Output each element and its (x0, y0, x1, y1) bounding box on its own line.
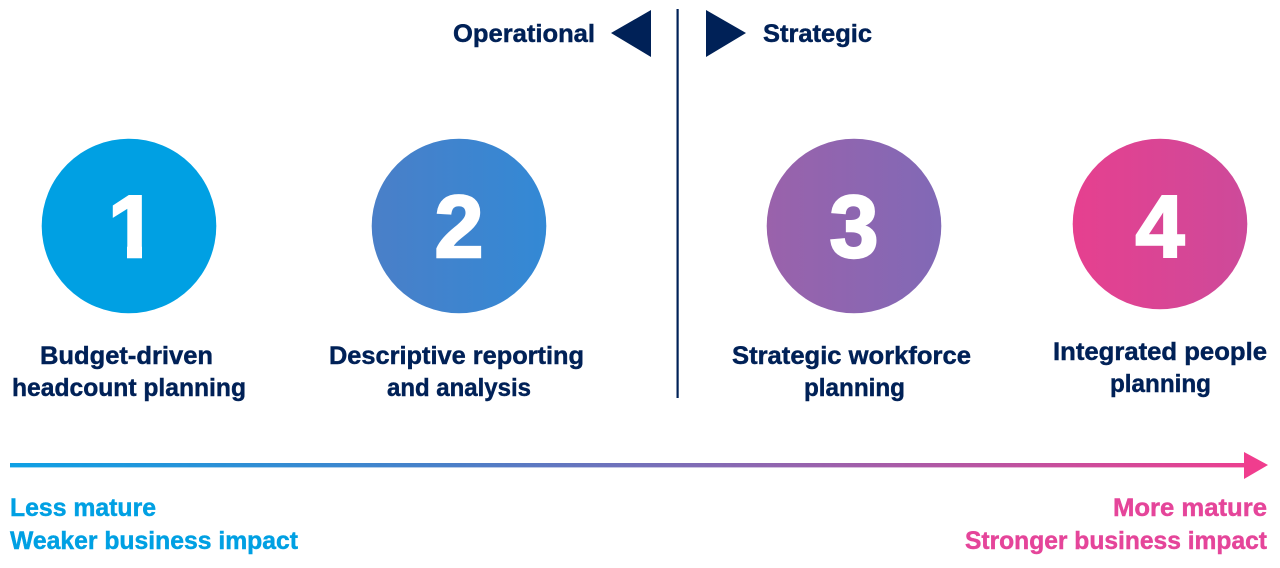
heading: operational direction: Operational (453, 20, 595, 48)
label: stage 2 (329, 342, 584, 402)
label: stage 4: planning (1110, 370, 1211, 398)
divider between operational and strategic (676, 9, 679, 398)
stage 1: budget-driven headcount planning (12, 139, 246, 402)
icon: circle number 1 (42, 139, 216, 313)
stage 2: descriptive reporting and analysis (329, 139, 584, 402)
label: stage 2: Descriptive reporting (329, 342, 584, 370)
text: more mature end of scale: More mature (1113, 494, 1267, 522)
label: stage 3 (732, 342, 971, 402)
icon: circle number 2: 2 (435, 177, 483, 276)
text: less mature end of scale (10, 494, 299, 555)
heading: operational direction (453, 10, 651, 57)
label: stage 1: Budget-driven (40, 342, 213, 370)
text: less mature end of scale: Less mature (10, 494, 156, 522)
stage 4: integrated people planning (1053, 139, 1267, 398)
text: less mature end of scale: Weaker business impact (10, 527, 299, 555)
label: stage 3: Strategic workforce (732, 342, 971, 370)
heading: strategic direction: Strategic (763, 20, 872, 48)
stage 3: strategic workforce planning (732, 139, 971, 402)
icon: circle number 2 (372, 139, 546, 313)
label: stage 4: Integrated people (1053, 338, 1267, 366)
icon: circle number 3: 3 (830, 177, 878, 276)
label: stage 1: headcount planning (12, 374, 246, 402)
arrow: maturity scale (10, 452, 1268, 479)
icon: circle number 1: 1 (108, 177, 157, 276)
text: more mature end of scale (965, 494, 1268, 555)
icon: circle number 4 (1073, 139, 1247, 309)
label: stage 1 (12, 342, 246, 402)
label: stage 4 (1053, 338, 1267, 398)
label: stage 2: and analysis (387, 374, 531, 402)
label: stage 3: planning (804, 374, 905, 402)
heading: strategic direction (706, 10, 872, 57)
text: more mature end of scale: Stronger business impact (965, 527, 1268, 555)
icon: circle number 4: 4 (1136, 177, 1185, 276)
icon: circle number 3 (767, 139, 941, 313)
